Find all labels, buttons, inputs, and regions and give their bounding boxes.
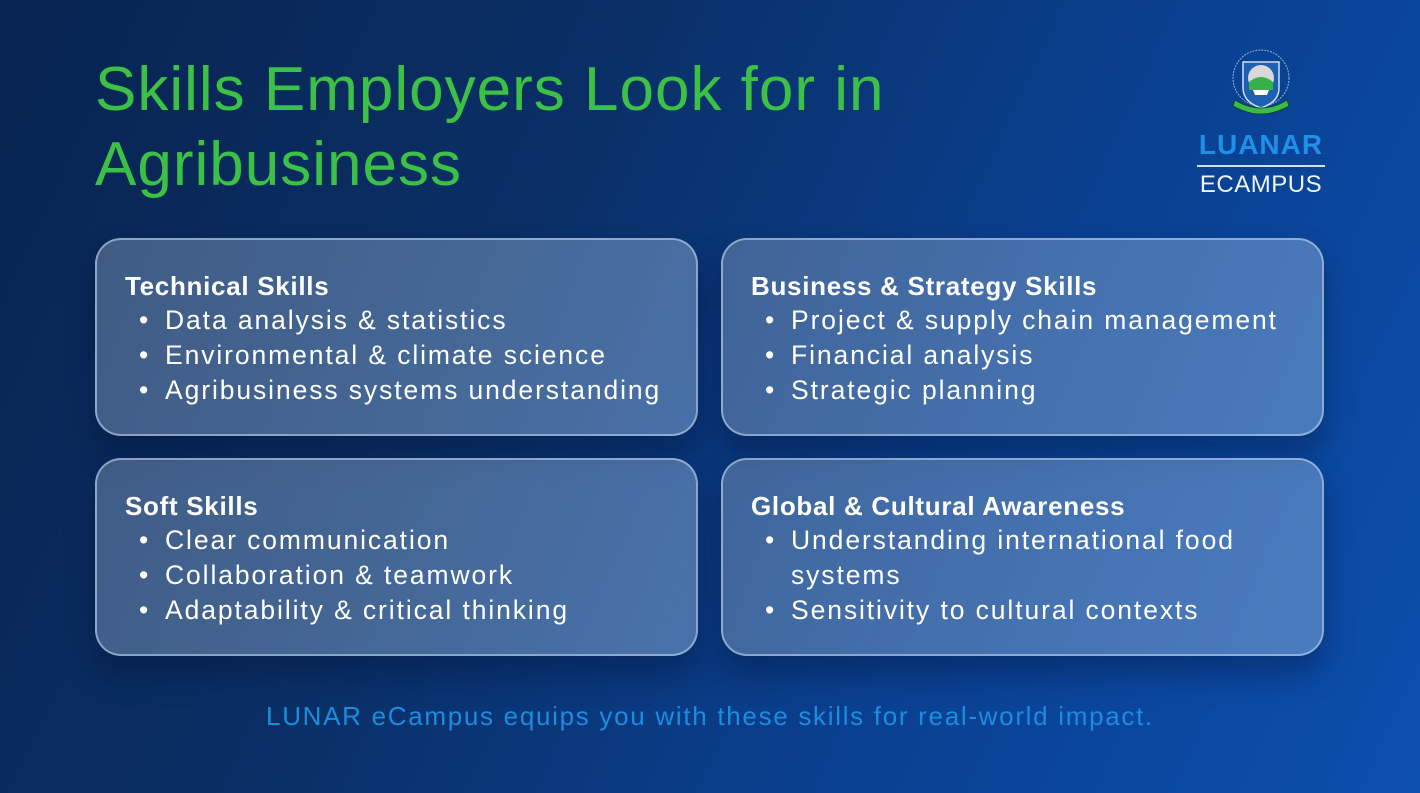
- panel: soft skills: Adaptability & critical thinking: [165, 595, 569, 625]
- panel: business & strategy skills: Financial analysis: [791, 340, 1034, 370]
- title: [95, 55, 884, 199]
- footer tagline: LUNAR eCampus equips you with these skills for real-world impact.: [266, 701, 1154, 731]
- panel: global & cultural awareness: systems: [791, 560, 901, 590]
- panel: business & strategy skills: Strategic planning: [791, 375, 1037, 405]
- panel: business & strategy skills: [721, 238, 1324, 436]
- title: Agribusiness: [95, 130, 462, 199]
- panel: global & cultural awareness: Understanding international food: [791, 525, 1235, 555]
- panel: business & strategy skills: Business & Strategy Skills: [751, 271, 1097, 301]
- title: Skills Employers Look for in: [95, 55, 884, 124]
- panel: technical skills: [95, 238, 698, 436]
- logo: [1197, 50, 1325, 198]
- logo text: ECAMPUS: [1200, 170, 1322, 198]
- icon: crest: [1232, 50, 1290, 114]
- panel: global & cultural awareness: Global & Cultural Awareness: [751, 491, 1125, 521]
- panel: soft skills: [95, 458, 698, 656]
- panel: soft skills: Clear communication: [165, 525, 450, 555]
- logo text: LUANAR: [1199, 129, 1323, 160]
- panel: business & strategy skills: Project & supply chain management: [791, 305, 1278, 335]
- panel: global & cultural awareness: Sensitivity to cultural contexts: [791, 595, 1199, 625]
- panel: technical skills: Technical Skills: [125, 271, 329, 301]
- panel: technical skills: Data analysis & statistics: [165, 305, 507, 335]
- panel: soft skills: Collaboration & teamwork: [165, 560, 514, 590]
- panel: technical skills: Environmental & climate science: [165, 340, 607, 370]
- panel: global & cultural awareness: [721, 458, 1324, 656]
- panel: soft skills: Soft Skills: [125, 491, 258, 521]
- panel: technical skills: Agribusiness systems understanding: [165, 375, 661, 405]
- logo text: [1197, 129, 1325, 198]
